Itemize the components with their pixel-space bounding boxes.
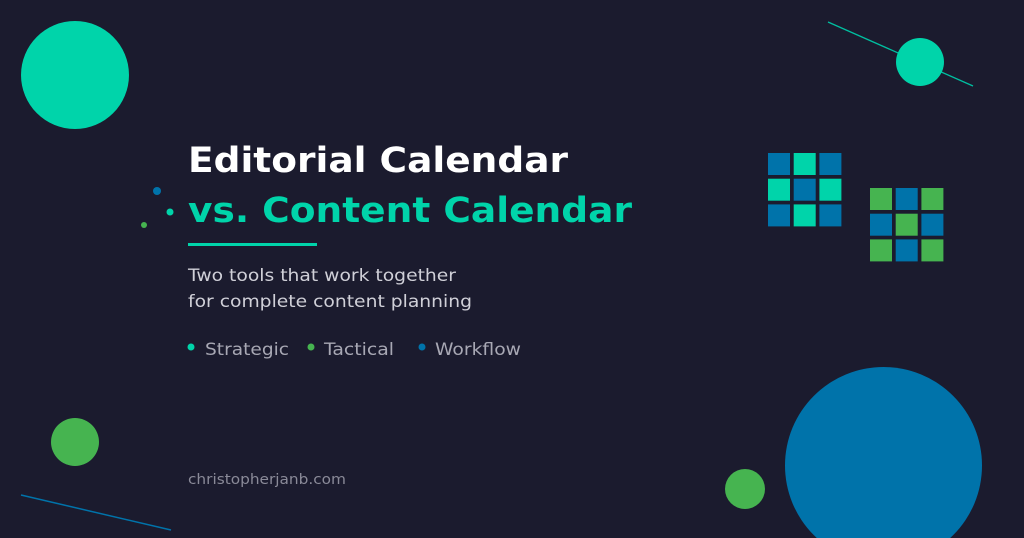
title: Editorial Calendar — [188, 141, 569, 181]
footer url: christopherjanb.com — [188, 472, 346, 488]
icon: calendar grid 2 — [870, 188, 943, 261]
subtitle: Two tools that work together — [187, 266, 456, 286]
tags: Workflow — [435, 340, 521, 360]
decor: green circle bottom-left — [51, 418, 99, 466]
decor: top-right line with circle — [828, 22, 973, 86]
title: vs. Content Calendar — [188, 191, 633, 231]
decor: small dots — [141, 187, 174, 228]
icon: calendar grid 1 — [768, 153, 841, 226]
underline accent — [188, 243, 317, 246]
title — [188, 141, 633, 231]
decor: big blue circle — [785, 367, 982, 538]
tags — [188, 340, 521, 360]
decor: small green circle — [725, 469, 765, 509]
decor: bottom-left line — [21, 495, 171, 530]
tags: Strategic — [205, 340, 289, 360]
decor: big teal circle — [21, 21, 129, 129]
subtitle — [187, 266, 472, 312]
subtitle: for complete content planning — [188, 292, 472, 312]
tags: Tactical — [323, 340, 394, 360]
